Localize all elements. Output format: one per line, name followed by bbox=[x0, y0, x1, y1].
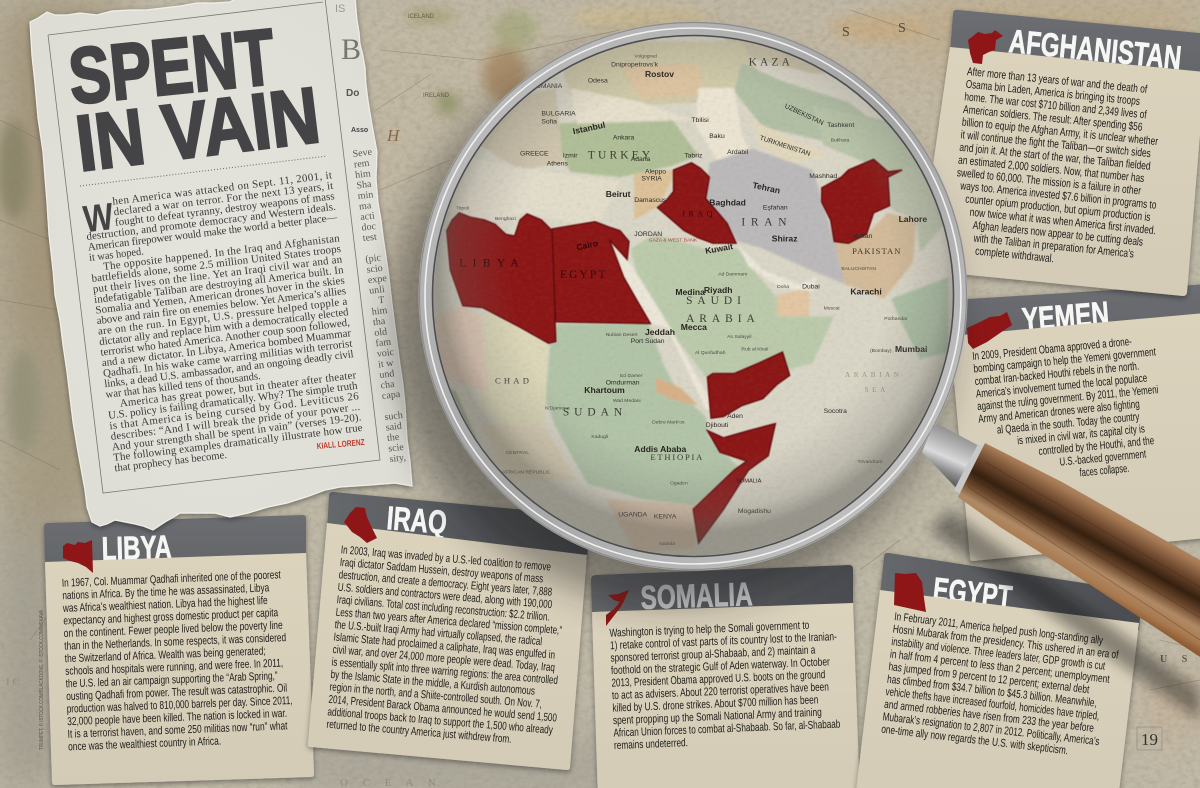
lens map labels: Eşfahan bbox=[763, 204, 788, 211]
lens map labels: Ed Damer bbox=[620, 373, 643, 379]
Libya text: nations in Africa. By the time he was assassinated, Libya bbox=[62, 582, 270, 602]
panel: Iraq bbox=[308, 492, 590, 770]
lens map labels: SYRIA bbox=[641, 176, 662, 183]
Yemen header bar bbox=[950, 284, 1200, 345]
neighbouring article fragments: it w bbox=[378, 358, 395, 370]
Iraq text: the U.S.-built Iraqi Army had virtually collapsed, the radical bbox=[334, 619, 542, 648]
neighbouring article fragments bbox=[335, 3, 410, 465]
Iraq card body bbox=[308, 523, 587, 770]
Egypt text: In February 2011, America helped push long-standing ally bbox=[894, 611, 1104, 647]
lens map labels: Medina bbox=[675, 287, 705, 297]
lens map labels: Port Sudan bbox=[631, 338, 665, 345]
Yemen heading: YEMEN bbox=[1021, 294, 1110, 338]
lens map labels: Dubai bbox=[802, 284, 820, 291]
lens map labels: ROMANIA bbox=[531, 83, 563, 90]
article text: indefatigable Taliban are destroying all America built. In bbox=[93, 264, 345, 306]
article text: are on the run. In Egypt, U.S. pressure helped topple a bbox=[97, 296, 348, 338]
neighbouring article fragments: capa bbox=[381, 389, 401, 402]
lens map labels: (Bombay) bbox=[870, 348, 892, 354]
lens map labels: Tbilisi bbox=[691, 117, 709, 124]
map labels: I C bbox=[6, 676, 20, 688]
article text: hen America was attacked on Sept. 11, 2001, it bbox=[112, 169, 333, 208]
Somalia text: to act as advisers. About 220 terrorist operatives have been bbox=[612, 681, 829, 702]
panel: Somalia bbox=[591, 565, 860, 788]
lens map labels: PAKISTAN bbox=[852, 246, 902, 256]
map labels: ICELAND bbox=[408, 14, 435, 20]
lens map labels: Sofia bbox=[541, 119, 557, 126]
lens map labels: Jeddah bbox=[645, 327, 675, 337]
lens map labels: Aden bbox=[727, 413, 743, 420]
map labels: S bbox=[842, 25, 850, 40]
Somalia text: foothold on the strategic Gulf of Aden waterway. In October bbox=[611, 656, 830, 677]
Libya text: schools and hospitals were running, and were free. In 2011, bbox=[65, 657, 283, 678]
neighbouring article fragments: cha bbox=[380, 379, 396, 391]
page number bbox=[1137, 727, 1162, 750]
page number: 19 bbox=[1141, 730, 1158, 749]
map labels: S bbox=[898, 21, 906, 36]
neighbouring article fragments: rem bbox=[353, 158, 370, 171]
article text: U.S. policy is failing dramatically. Why? The simple truth bbox=[107, 380, 359, 422]
icon: Egypt map bbox=[894, 573, 926, 612]
land masses bbox=[724, 38, 826, 74]
Egypt text: Hosni Mubarak from the presidency. This ushered in an era of bbox=[892, 624, 1120, 662]
lens map labels: Aleppo bbox=[645, 169, 666, 176]
lens map labels: Omdurman bbox=[606, 379, 640, 386]
Afghanistan card body bbox=[918, 47, 1200, 296]
lens map labels: Wad Medani bbox=[613, 398, 641, 404]
neighbouring article fragments: him bbox=[355, 168, 372, 181]
lens map labels: TURKMENISTAN bbox=[759, 135, 811, 158]
neighbouring article fragments: him bbox=[371, 305, 388, 318]
lens map labels: Tehran bbox=[752, 180, 781, 196]
lens map labels: Porbandar bbox=[884, 316, 908, 322]
lens map labels: KENYA bbox=[654, 514, 677, 521]
lens map labels: CHAD bbox=[495, 376, 532, 386]
lens map labels: Tabriz bbox=[684, 152, 703, 159]
neighbouring article fragments: the bbox=[386, 432, 400, 444]
article text: America has great power, but in theater after theater bbox=[119, 369, 357, 410]
neighbouring article fragments: min bbox=[357, 189, 374, 202]
Libya header bar bbox=[44, 515, 306, 565]
article text: above and rain fire on enemies below. Yet America’s allies bbox=[96, 285, 347, 327]
article text: terrorist who hated America. Another coup soon followed, bbox=[100, 317, 351, 359]
title: IN VAIN bbox=[71, 70, 324, 188]
article text: war that has killed tens of thousands. bbox=[105, 370, 261, 401]
Afghanistan text bbox=[949, 66, 1170, 275]
lens map labels: Mumbai bbox=[895, 344, 927, 354]
lens vignette bbox=[433, 36, 953, 556]
neighbouring article fragments: voic bbox=[376, 347, 395, 360]
Somalia text: spent propping up the Somali National Army and training bbox=[613, 707, 822, 727]
Iraq text: civil war, and over 24,000 more people were dead. Today, Iraq bbox=[332, 644, 555, 674]
Egypt heading: EGYPT bbox=[931, 570, 1014, 616]
lens map labels: Izmir bbox=[563, 152, 578, 159]
article text: The opposite happened. In the Iraq and Afghanistan bbox=[103, 232, 341, 273]
lens map labels: Rostov bbox=[645, 69, 674, 79]
Egypt text: one-time ally now regards the U.S. with skepticism. bbox=[881, 724, 1069, 757]
lens map labels: CENTRAL bbox=[506, 450, 529, 456]
Afghanistan text: complete withdrawal. bbox=[975, 246, 1054, 265]
Libya card body bbox=[45, 553, 314, 785]
lens map labels: SUDAN bbox=[563, 407, 627, 419]
article text bbox=[81, 169, 365, 475]
Libya text: It is a terrorist haven, and some 250 militias now “run” what bbox=[67, 720, 288, 741]
icon: Afghanistan map bbox=[968, 30, 1003, 64]
lens map labels: Tripoli bbox=[456, 205, 469, 211]
Libya heading: LIBYA bbox=[101, 528, 172, 567]
lens map labels: Adana bbox=[631, 156, 651, 163]
lens map labels: Nairobi bbox=[659, 541, 675, 547]
lens map labels: UGANDA bbox=[618, 511, 648, 518]
torn paper sheet bbox=[30, 0, 412, 530]
Yemen text: controlled by the Houthi, and the bbox=[1038, 435, 1155, 458]
handle shadow bbox=[930, 510, 1200, 720]
panel: torn newspaper article bbox=[30, 0, 412, 530]
lens map labels: IRAN bbox=[741, 216, 792, 228]
lens map labels: Odesa bbox=[588, 77, 608, 84]
magnifying glass bbox=[420, 20, 1200, 657]
lens map labels: Ogaden bbox=[670, 480, 688, 486]
icon: Yemen map bbox=[967, 312, 1012, 349]
neighbouring article fragments: Seve bbox=[352, 147, 373, 160]
lens map labels: Damascus bbox=[634, 197, 667, 204]
lens map labels: SOMALIA bbox=[736, 478, 762, 484]
lens map labels: Ardabil bbox=[727, 149, 749, 156]
article text: fought to defeat tyranny, destroy weapons of mass bbox=[114, 190, 335, 229]
wooden grip bbox=[958, 443, 1200, 657]
neighbouring article fragments: tha bbox=[372, 316, 386, 328]
article text: is that America is being cursed by God. Leviticus 26 bbox=[109, 390, 360, 432]
panel: Egypt bbox=[855, 553, 1142, 788]
icon: Libya map bbox=[63, 540, 93, 573]
lens map labels: Socotra bbox=[824, 408, 847, 415]
neighbouring article fragments: acti bbox=[360, 210, 376, 223]
lens map labels: Al Qunfudhah bbox=[695, 350, 726, 356]
Iraq text: region in the north, and a Shiite-controlled south. On Nov. 7, bbox=[329, 681, 542, 711]
lens map labels: Ankara bbox=[613, 135, 635, 142]
neighbouring article fragments: scie bbox=[388, 442, 405, 455]
Yemen text: is mixed in civil war, its capital city is bbox=[1017, 423, 1146, 447]
article text: American firepower would make the world a better place— bbox=[87, 211, 338, 253]
lens map labels: Volgograd bbox=[634, 53, 657, 59]
Libya text: 32,000 people have been killed. The nation is locked in war. bbox=[67, 708, 287, 728]
lens map labels: Dnipropetrovs’k bbox=[611, 61, 659, 68]
lens map labels: Multan bbox=[852, 233, 873, 240]
Yemen text bbox=[972, 334, 1168, 488]
Afghanistan header bar bbox=[950, 10, 1200, 80]
drop cap: W bbox=[81, 196, 116, 241]
Iraq text: In 2003, Iraq was invaded by a U.S.-led coalition to remove bbox=[340, 544, 551, 574]
lens map labels: Muscat bbox=[824, 305, 840, 311]
credit line: TRUMPET, © ISTOCK.COM/BLACKDOVE, © ISTOCK.COM/MSKAVA bbox=[38, 609, 45, 750]
Iraq heading: IRAQ bbox=[385, 499, 448, 541]
neighbouring article fragments: sity, bbox=[389, 452, 406, 465]
lens map labels: ARABIA bbox=[686, 313, 760, 325]
Iraq text: destruction, and create a democracy. Eight years later, 7,888 bbox=[338, 569, 553, 599]
neighbouring article fragments: expe bbox=[367, 273, 388, 286]
Iraq text: U.S. soldiers and contractors were dead, along with 190,000 bbox=[337, 582, 553, 611]
lens map labels: Nubian Desert bbox=[606, 332, 638, 338]
Iraq text: Iraqi dictator Saddam Hussein, destroy weapons of mass bbox=[339, 557, 544, 585]
panel: Libya bbox=[44, 515, 314, 785]
panel: Afghanistan bbox=[918, 10, 1200, 296]
lens map labels: Trivandrum bbox=[857, 459, 883, 465]
magnifying glass shadow bbox=[392, 45, 952, 605]
Iraq text: Less than two years after America declared “mission complete,” bbox=[335, 607, 563, 637]
article text: put their lives on the line. Yet an Iraqi civil war and an bbox=[92, 253, 343, 296]
neighbouring article fragments: said bbox=[385, 421, 402, 434]
Libya text: production was halved to 810,000 barrels per day. Since 2011, bbox=[66, 695, 293, 716]
Iraq text: Islamic State had proclaimed a caliphate, Iraq was engulfed in bbox=[333, 632, 555, 662]
article text: declared a war on terror. For the next 13 years, it bbox=[113, 180, 334, 218]
lens map labels: Debre Mark’os bbox=[652, 420, 685, 426]
Yemen text: faces collapse. bbox=[1079, 463, 1130, 479]
Libya text bbox=[61, 569, 294, 753]
lens map labels: Baghdad bbox=[709, 198, 746, 208]
article text: that prophecy has become. bbox=[114, 449, 227, 474]
Yemen text: al Qaeda in the south. Today the country bbox=[996, 411, 1140, 437]
lens map labels: BALUCHISTAN bbox=[841, 266, 876, 272]
neighbouring article fragments: IS bbox=[335, 3, 345, 15]
icon: Somalia map bbox=[606, 590, 629, 626]
article text: destruction, and promote democracy and Western ideals. bbox=[86, 201, 336, 243]
neighbouring article fragments: (pic bbox=[365, 252, 382, 265]
neighbouring article fragments: scio bbox=[366, 263, 383, 276]
highlighted countries bbox=[447, 159, 902, 543]
Iraq text: Iraqi civilians. Total cost including reconstruction: $2.2 trillion. bbox=[336, 594, 550, 624]
article text: links, a dead U.S. ambassador, and an ongoing deadly civil bbox=[104, 348, 354, 390]
Iraq text: is essentially split into three warring regions: the area controlled bbox=[331, 656, 558, 687]
neighbouring article fragments: Sha bbox=[356, 179, 373, 192]
lens map labels: Addis Ababa bbox=[634, 444, 687, 454]
lens map labels: Djibouti bbox=[706, 422, 729, 429]
neighbouring article fragments: B bbox=[341, 33, 361, 66]
lens map labels: GREECE bbox=[520, 151, 549, 158]
neighbouring article fragments: unli bbox=[369, 284, 386, 297]
map inside lens bbox=[434, 36, 952, 556]
Iraq header bar bbox=[327, 492, 590, 560]
Egypt text bbox=[881, 611, 1121, 762]
lens map labels: Bukhara bbox=[831, 137, 850, 143]
map labels: H bbox=[386, 126, 401, 145]
Somalia text: 1) retake control of vast parts of its country lost to the Iranian- bbox=[610, 631, 837, 652]
metal neck bbox=[922, 424, 985, 492]
title: SPENT bbox=[65, 12, 279, 121]
lens map labels: Rub al Khali bbox=[741, 346, 768, 352]
lens map labels: LIBYA bbox=[459, 257, 525, 269]
lens map labels: N’Djamena bbox=[545, 405, 570, 411]
title bbox=[65, 12, 324, 188]
lens map labels: KAZA bbox=[749, 57, 793, 69]
lens map labels: Lahore bbox=[899, 214, 927, 224]
lens map labels: TURKEY bbox=[588, 150, 653, 162]
lens map labels: Benghazi bbox=[495, 216, 516, 222]
Egypt text: has jumped from 9 percent to 12 percent; external debt bbox=[888, 661, 1091, 696]
Afghanistan text: Osama bin Laden, America is bringing its troops bbox=[965, 79, 1141, 108]
neighbouring article fragments: such bbox=[384, 410, 403, 423]
Yemen text: In 2009, President Obama approved a drone- bbox=[972, 336, 1132, 363]
Egypt text: Mubarak’s resignation to 2,807 in 2012. Politically, America’s bbox=[882, 711, 1100, 748]
Somalia text bbox=[609, 619, 841, 752]
neighbouring article fragments: T bbox=[378, 295, 385, 306]
Somalia header bar bbox=[591, 565, 853, 616]
lens map labels: ETHIOPIA bbox=[650, 452, 704, 462]
Libya text: the U.S. led an air campaign supporting the “Arab Spring,” bbox=[66, 670, 278, 690]
Iraq text: by the Islamic State in the middle, a Kurdish autonomous bbox=[330, 669, 536, 698]
Somalia text: African Union forces to combat al-Shabaab. So far, al-Shabaab bbox=[613, 719, 841, 740]
lens map labels: Ad Dammam bbox=[718, 271, 747, 277]
lens map labels: JORDAN bbox=[634, 231, 662, 238]
article text: And your strength shall be spent in vain” (verses 19-20). bbox=[111, 411, 362, 453]
Somalia text: sponsored terrorist group al-Shabaab, and 2) maintain a bbox=[610, 644, 816, 665]
Egypt card body bbox=[855, 590, 1139, 788]
neighbouring article fragments: Do bbox=[346, 88, 359, 99]
Yemen text: U.S.-backed government bbox=[1059, 448, 1147, 469]
Somalia text: 2013, President Obama approved U.S. boots on the ground bbox=[611, 669, 826, 690]
lens map labels: ARABIAN bbox=[845, 371, 902, 379]
lens map labels: Tashkent bbox=[827, 122, 854, 129]
lens map labels: Athens bbox=[547, 161, 568, 168]
Iraq text: returned to the country America just withdrew from. bbox=[326, 719, 512, 746]
Egypt text: vehicle thefts have increased fourfold, homicides have tripled, bbox=[885, 686, 1100, 723]
Egypt text: has climbed from $34.7 billion to $45.3 billion. Meanwhile, bbox=[886, 674, 1097, 710]
lens map labels: Karachi bbox=[850, 286, 882, 296]
neighbouring article fragments: und bbox=[379, 368, 395, 381]
inner frame rules bbox=[48, 0, 380, 493]
lens map labels: Kuwait bbox=[704, 241, 734, 256]
handle bbox=[922, 424, 1200, 657]
Egypt header bar bbox=[880, 553, 1142, 630]
Somalia card body bbox=[592, 603, 860, 788]
neighbouring article fragments: fam bbox=[375, 337, 392, 349]
lens map labels: Doha bbox=[777, 284, 789, 290]
lens map labels bbox=[456, 53, 927, 547]
lens map labels: UZBEKISTAN bbox=[783, 103, 825, 127]
Egypt text: and armed robberies have risen from 233 the year before bbox=[884, 699, 1094, 735]
Somalia text: Washington is trying to help the Somali government to bbox=[609, 620, 810, 640]
lens rim bbox=[420, 22, 966, 570]
neighbouring article fragments: test bbox=[362, 232, 378, 244]
lens map labels: Beirut bbox=[606, 189, 631, 199]
lens map labels: Baku bbox=[709, 133, 725, 140]
lens map labels: Khartoum bbox=[584, 385, 625, 395]
Libya text: was Africa’s wealthiest nation. Libya had the highest life bbox=[62, 595, 268, 615]
lens map labels: Kadugli bbox=[591, 434, 608, 440]
lens map labels: IRAQ bbox=[682, 209, 716, 218]
article text: The following examples dramatically illustrate how true bbox=[113, 422, 363, 464]
Iraq text: 2014, President Barack Obama announced he would send 1,500 bbox=[328, 694, 557, 725]
Libya text: expectancy and highest gross domestic product per capita bbox=[63, 607, 279, 627]
lens map labels: AFRICAN REPUBLIC bbox=[502, 470, 551, 476]
lens map labels: EGYPT bbox=[560, 269, 607, 281]
neighbouring article fragments: doc bbox=[361, 221, 377, 234]
panel: Yemen bbox=[950, 284, 1200, 561]
Libya text: on the continent. Fewer people lived below the poverty line bbox=[64, 620, 283, 640]
Yemen card body bbox=[950, 313, 1200, 561]
Libya text: once was the wealthiest country in Africa. bbox=[68, 736, 221, 753]
Iraq text bbox=[326, 544, 570, 749]
article text: it was hoped. bbox=[88, 245, 144, 264]
neighbouring article fragments: ma bbox=[358, 200, 372, 213]
lens map labels: Mashhad bbox=[809, 173, 837, 180]
Libya text: the Switzerland of Africa. Wealth was being generated; bbox=[65, 646, 266, 665]
lens map labels: Mecca bbox=[681, 322, 707, 332]
article text: battlefields alone, some 2.5 million United States troops bbox=[91, 243, 342, 285]
map labels: IRELAND bbox=[423, 93, 450, 99]
article text: dictator ally and replace him with a democratically elected bbox=[99, 306, 350, 348]
neighbouring article fragments: old bbox=[374, 326, 388, 339]
Somalia heading: SOMALIA bbox=[640, 575, 753, 616]
Egypt text: in half from 4 percent to less than 2 percent; unemployment bbox=[889, 649, 1111, 686]
byline: KIALL LORENZ bbox=[316, 437, 365, 451]
lens map labels: SAUDI bbox=[686, 295, 746, 307]
article text: Qadhafi. In his wake came warring militias with terrorist bbox=[102, 338, 353, 380]
ferrule bbox=[954, 444, 986, 495]
lens map labels: As Sulayyil bbox=[727, 334, 752, 340]
Libya text: than in the Netherlands. In some respects, it was considered bbox=[64, 632, 286, 653]
Afghanistan text: with the Taliban in preparation for America’s bbox=[972, 233, 1135, 261]
Egypt text: instability and violence. Three leaders later, GDP growth is cut bbox=[891, 636, 1106, 673]
article text: and a new dictator. In Libya, America bombed Muammar bbox=[101, 327, 352, 369]
lens map labels: Istanbul bbox=[572, 120, 606, 136]
lens map labels: Cairo bbox=[575, 238, 599, 252]
lens map labels: Riyadh bbox=[704, 285, 732, 295]
Somalia text: killed by U.S. drone strikes. About $700 million has been bbox=[612, 694, 819, 715]
lens map labels: Shiraz bbox=[772, 233, 797, 243]
article text: Somalia and Yemen, American drones hover in the skies bbox=[95, 275, 345, 317]
dotted rule bbox=[80, 156, 327, 186]
Somalia text: remains undeterred. bbox=[614, 737, 688, 752]
lens map labels: BULGARIA bbox=[541, 111, 576, 118]
Libya text: In 1967, Col. Muammar Qadhafi inherited one of the poorest bbox=[62, 569, 282, 590]
icon: Iraq map bbox=[344, 507, 377, 543]
article text: describes: “And I will break the pride of your power ... bbox=[110, 401, 361, 443]
neighbouring article fragments: Asso bbox=[351, 127, 368, 134]
lens map labels: GAZA & WEST BANK bbox=[649, 237, 698, 243]
lens map labels: SEA bbox=[865, 386, 889, 394]
Libya text: ousting Qadhafi from power. The result was catastrophic. Oil bbox=[66, 683, 287, 703]
Iraq text: additional troops back to Iraq to support the 1,500 who already bbox=[327, 706, 553, 737]
lens map labels: Mogadishu bbox=[738, 508, 771, 515]
